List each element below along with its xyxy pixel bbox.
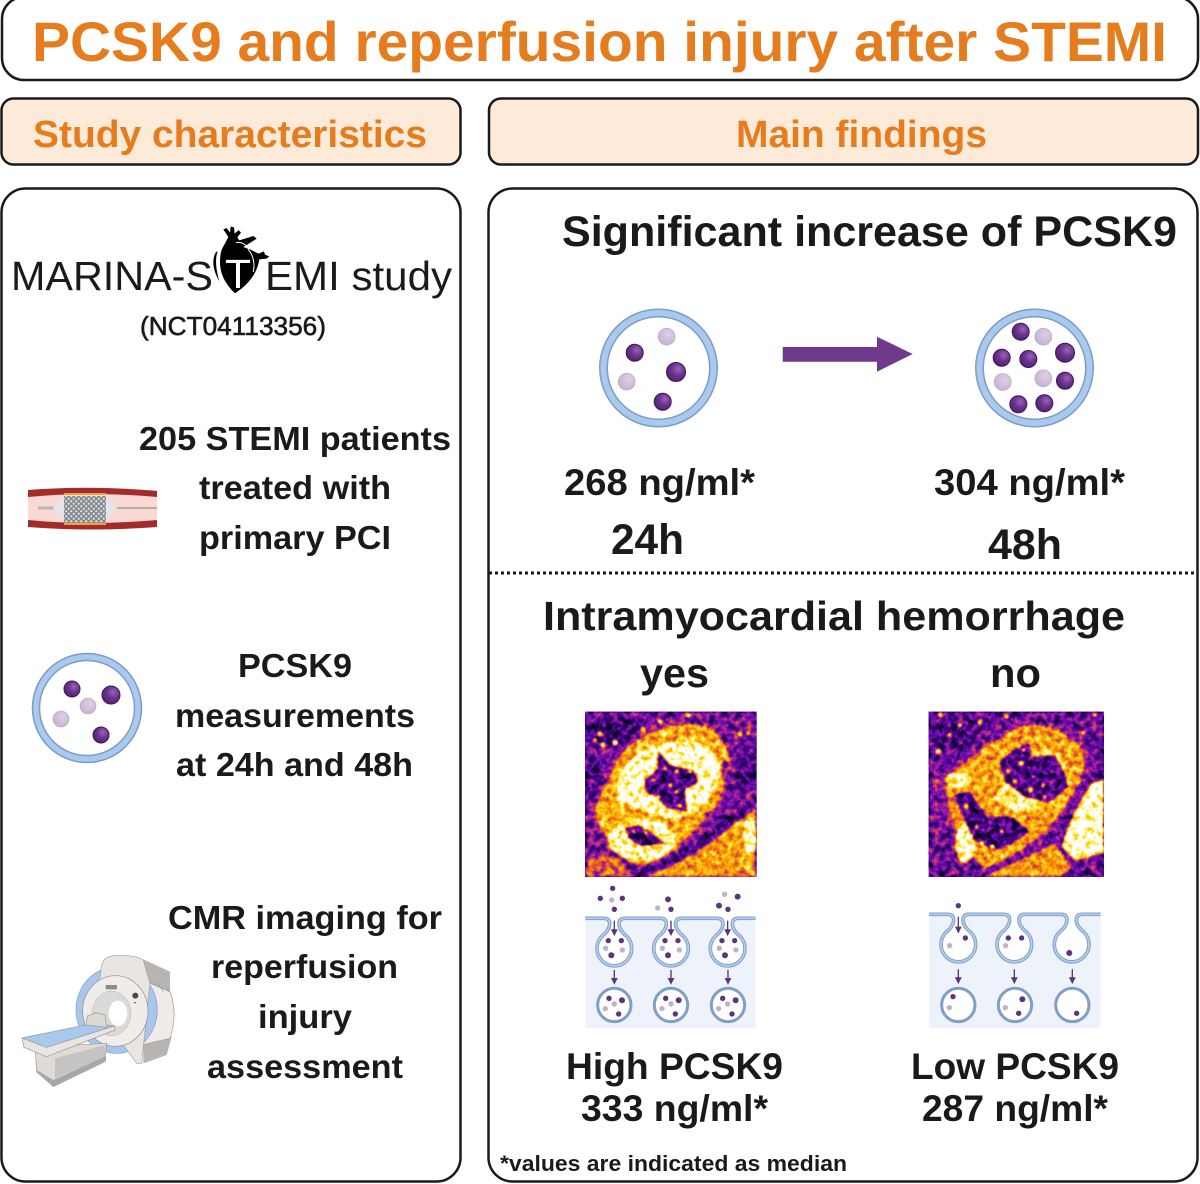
arrow: increase [783,337,913,372]
text: CMR imaging: assessment [207,1048,403,1085]
image: CMR map with hemorrhage [585,712,757,877]
label: no: no [990,650,1041,696]
text: CMR imaging: reperfusion [211,948,398,985]
diagram: high PCSK9 endocytosis [585,886,756,1028]
text: patients: 205 STEMI patients [139,420,451,457]
value: 24h: 24h [611,516,684,564]
value: 24h [564,462,756,564]
text: patients: primary PCI [199,519,391,556]
text: measurements: measurements [175,697,415,734]
text: measurements [175,647,415,783]
study name with heart logo [11,227,453,299]
icon: MRI scanner [22,955,174,1087]
panel: study characteristics [2,188,460,1182]
text: CMR imaging: injury [258,998,353,1035]
value: 48h: 48h [988,521,1062,569]
result: low PCSK9: Low PCSK9 [911,1046,1119,1087]
heading: significant increase: Significant increase of PCSK9 [562,208,1177,256]
text: CMR imaging: CMR imaging for [168,899,442,936]
text: patients [139,420,451,556]
heading: intramyocardial hemorrhage: Intramyocardial hemorrhage [543,593,1125,639]
study name with heart logo: MARINA-S [11,253,213,299]
footnote: *values are indicated as median [500,1151,847,1176]
heading: main findings: Main findings [736,114,987,156]
text: patients: treated with [199,469,391,506]
study name with heart logo: EMI study [265,253,453,299]
result: high PCSK9: High PCSK9 [566,1046,783,1087]
text: measurements: PCSK9 [238,647,352,684]
label: yes: yes [640,650,709,696]
text: measurements: at 24h and 48h [176,746,413,783]
study name with heart logo: T [225,251,251,297]
diagram: low PCSK9 endocytosis [929,903,1101,1028]
title banner: PCSK9 and reperfusion injury after STEMI [32,10,1167,73]
result: low PCSK9: 287 ng/ml* [922,1088,1109,1129]
result: high PCSK9: 333 ng/ml* [581,1088,769,1129]
value: 48h: 304 ng/ml* [934,462,1126,503]
heading: study characteristics: Study characteristics [33,114,427,156]
icon: PCSK9 vesicle [36,657,138,759]
icon: vesicle at 48h [980,313,1090,423]
result: high PCSK9 [566,1046,783,1129]
trial registration: (NCT04113356) [140,311,326,341]
value: 24h: 268 ng/ml* [564,462,756,503]
heading: main findings [489,98,1198,164]
value: 48h [934,462,1126,569]
heading: study characteristics [2,98,460,164]
image: CMR map without hemorrhage [929,712,1104,877]
icon: stent in artery [28,488,157,530]
result: low PCSK9 [911,1046,1119,1129]
icon: vesicle at 24h [604,313,714,423]
panel: main findings [488,188,1198,1182]
text: CMR imaging [168,899,442,1085]
